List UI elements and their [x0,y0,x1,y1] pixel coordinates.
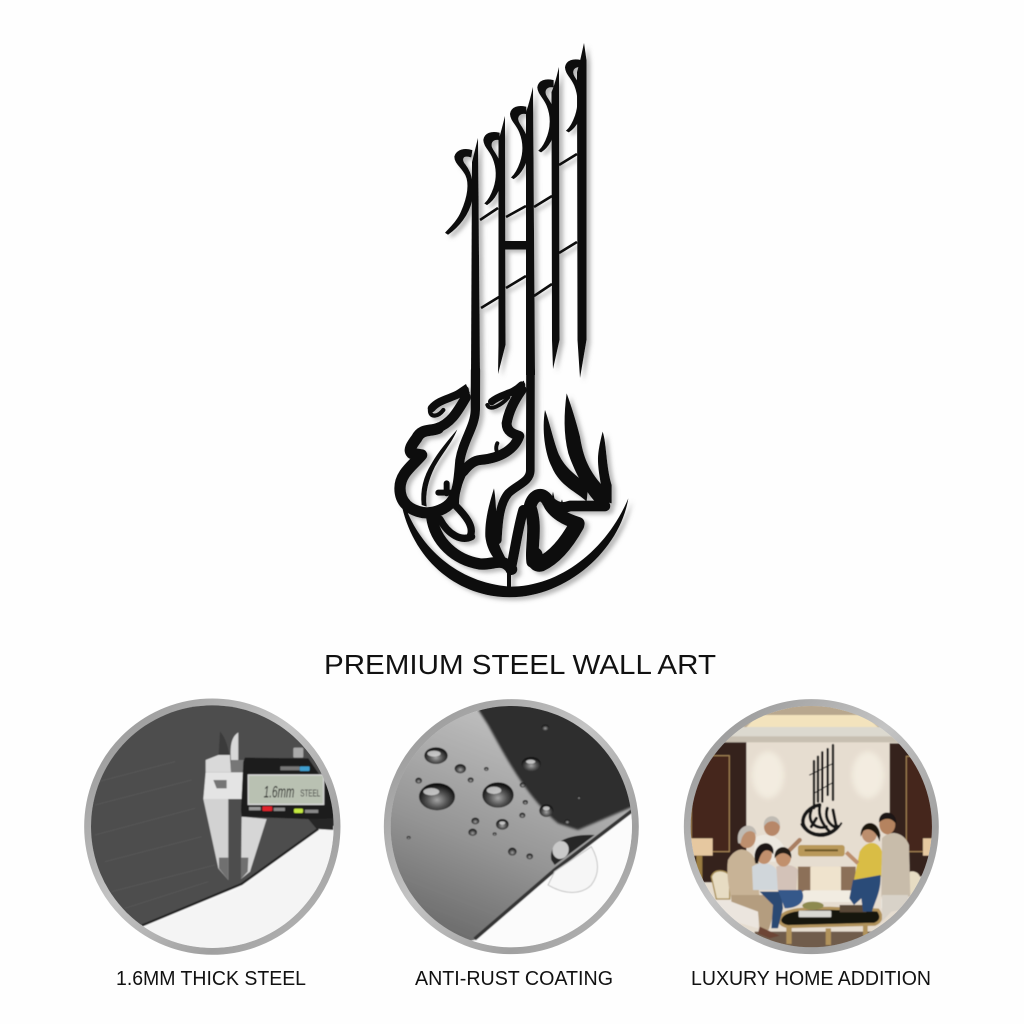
title: PREMIUM STEEL WALL ART [324,649,716,680]
living room photo [690,706,932,948]
panel: anti-rust coating [378,695,645,962]
family: man left [727,826,780,938]
caliper photo: 1.6mm [264,782,294,801]
upper alif bars [471,43,586,378]
mounting bracket [505,241,527,250]
caliper jaws [218,732,229,754]
caliper photo [91,705,334,948]
coffee table [780,908,881,927]
family: elder behind [753,816,800,862]
floor [754,931,872,948]
cross strokes [480,154,577,308]
plaque [798,845,845,856]
alif flourishes [446,60,584,234]
caption: home: LUXURY HOME ADDITION [691,968,931,990]
panel: luxury home [678,695,945,962]
caliper photo: STEEL [300,789,321,800]
caption: thickness: 1.6MM THICK STEEL [116,968,306,990]
ring [687,703,935,951]
miniature wall art [801,745,841,836]
water droplets [407,725,581,859]
family: man right [878,812,910,920]
ring [88,702,337,951]
family: woman right [846,823,882,912]
digital display [241,758,333,820]
wet steel photo [390,706,632,948]
crescent base [402,498,628,597]
caption: coating: ANTI-RUST COATING [415,968,613,990]
lower script medallion [400,370,628,597]
family: children [752,843,803,928]
calligraphy wall art [400,43,628,597]
panel: steel thickness [84,698,340,955]
sofa [711,871,730,899]
ring [387,703,635,951]
